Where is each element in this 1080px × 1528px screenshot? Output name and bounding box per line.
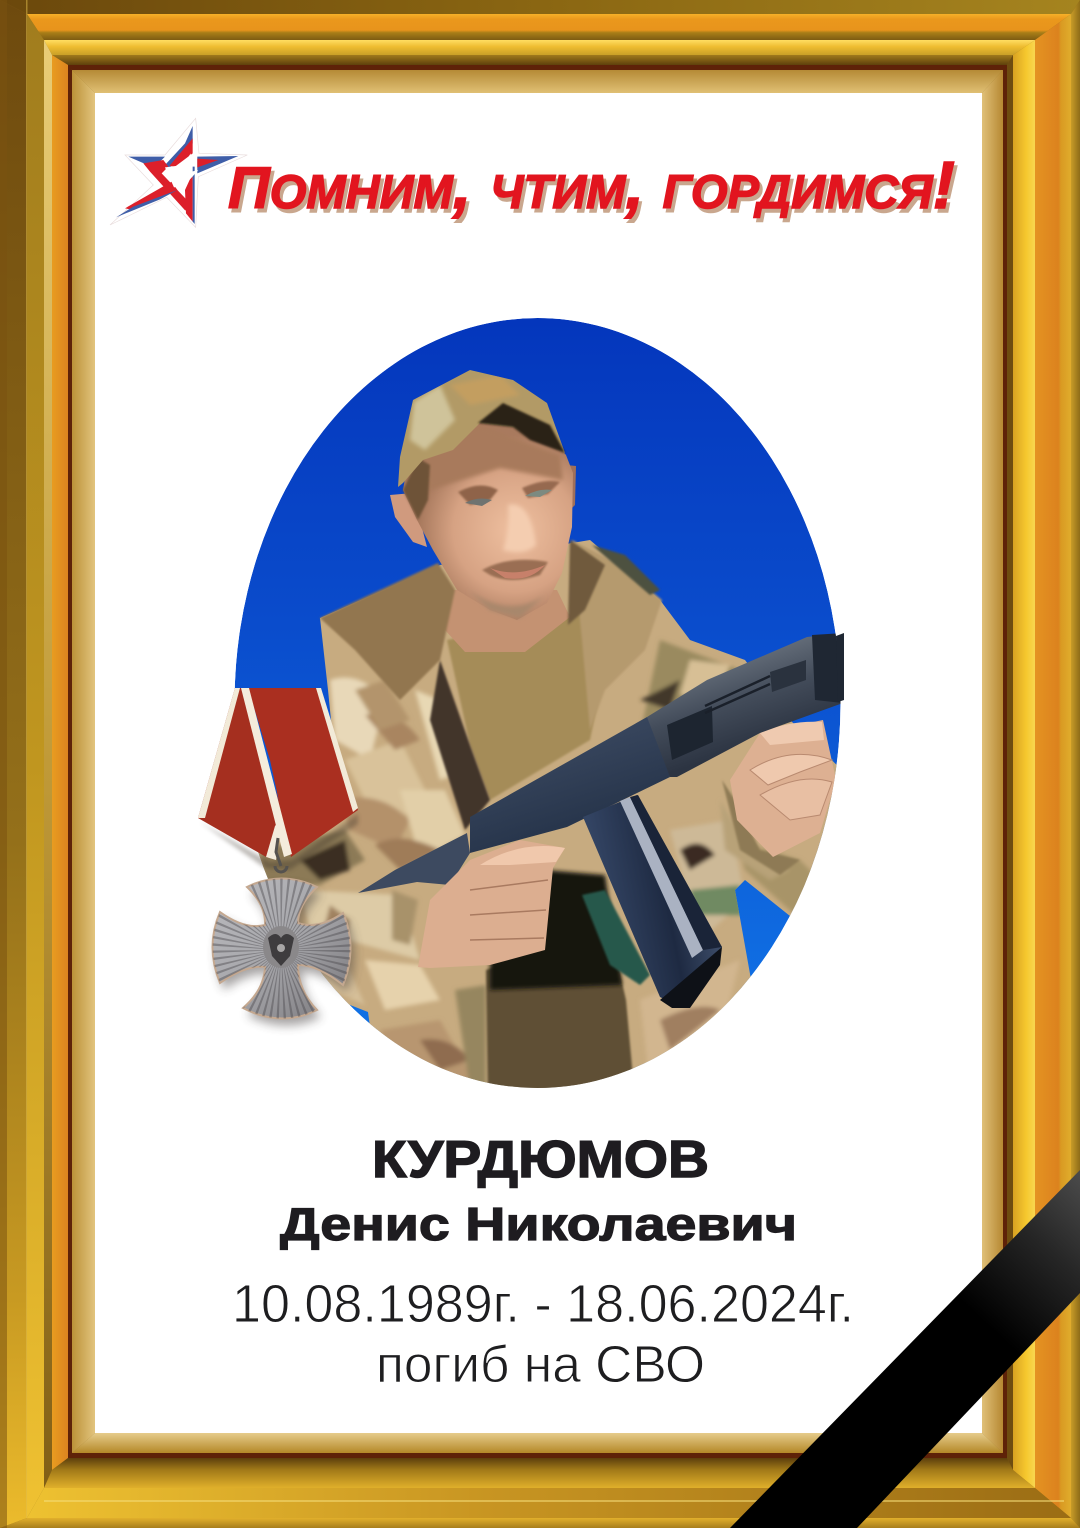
photo: cap [398, 370, 565, 487]
photo: right hand [730, 720, 836, 857]
photo: rifle magazine [583, 795, 722, 1008]
photo: left collar [320, 563, 455, 700]
medal: ribbon shadow [200, 814, 358, 870]
medal: eagle emblem [263, 926, 299, 968]
photo: t-shirt upper [446, 614, 595, 800]
photo: t-shirt lower [484, 968, 634, 1088]
photo: sky [234, 318, 840, 1088]
slogan [228, 148, 958, 227]
photo: ear left [390, 493, 427, 547]
photo: rifle stock [358, 833, 470, 893]
photo: eyes [465, 499, 492, 506]
photo: green pouch [582, 890, 650, 985]
medal: ribbon and cross [198, 688, 358, 1026]
life dates: 10.08.1989г. - 18.06.2024г. [232, 1274, 854, 1334]
given name and patronymic: Денис Николаевич [280, 1198, 797, 1250]
photo: right collar [572, 540, 662, 730]
photo: right sleeve cuff [722, 780, 800, 875]
photo: rifle muzzle beyond oval [836, 633, 844, 702]
surname: КУРДЮМОВ [372, 1131, 709, 1189]
frame: red lip [68, 65, 1007, 1458]
photo: collar shadow [568, 540, 605, 625]
logo: tricolour star [110, 118, 247, 227]
slogan shadow: Помним, чтим, гордимся! [231, 152, 958, 227]
photo: jacket [250, 540, 842, 1100]
photo: trigger hand [418, 840, 565, 968]
medal: cross rays [236, 905, 326, 995]
caption: погиб на СВО [376, 1336, 705, 1394]
frame: white card [95, 93, 982, 1433]
photo: inner shadow of jacket [430, 660, 490, 830]
portrait oval photo [234, 318, 843, 1100]
photo: nose [503, 504, 536, 552]
photo: moustache and mouth [482, 560, 548, 580]
frame: matte [72, 70, 1003, 1453]
photo: face [403, 420, 573, 620]
photo: rifle handguard [647, 633, 843, 777]
medal: ring [275, 838, 287, 872]
medal: cross shadow [216, 886, 354, 1026]
black mourning ribbon [730, 1170, 1080, 1528]
medal: cross [212, 878, 350, 1019]
photo: ear right [570, 465, 576, 508]
photo: rifle receiver [470, 717, 670, 853]
medal: ribbon [198, 688, 358, 860]
photo: shadow under rifle [490, 870, 622, 990]
photo: dark collar edge [592, 545, 660, 595]
slogan text: Помним, чтим, гордимся! [228, 148, 955, 223]
photo: neck [445, 590, 570, 652]
